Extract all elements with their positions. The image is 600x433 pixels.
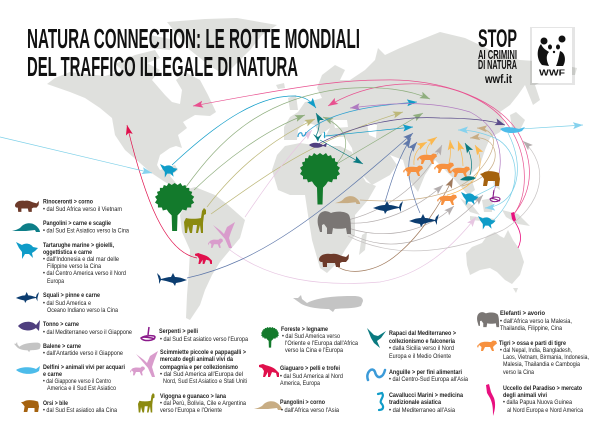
legend: snakes: • dal Sud Est asiatico verso l'Europa (160, 336, 248, 343)
world map (47, 18, 577, 320)
arrow: parrot to South East Asia (230, 217, 476, 283)
legend: eels (367, 369, 468, 383)
icon: turtle Caribbean (160, 164, 178, 178)
campaign slogan: wwf.it (484, 72, 512, 86)
icon: eagle (367, 328, 386, 348)
legend: forests: • dal Sud America verso (282, 333, 340, 340)
legend: monkeys and parrots (130, 349, 247, 385)
arrow: timber to Europe (194, 115, 305, 190)
icon: monkey (208, 238, 223, 248)
legend: turtles: • dall'Indonesia e dal mar delle (43, 256, 119, 263)
legend: bird of paradise: degli animali vivi (503, 392, 547, 399)
legend: forests: verso la Cina e l'Europa (285, 347, 343, 354)
legend: forests: l'Oriente e l'Europa dall'Africa (285, 340, 358, 347)
arrow: vicuna to Europe (207, 119, 315, 207)
icon: tiger 2 (403, 166, 423, 176)
icon: tree Africa (300, 153, 340, 204)
WWF logo (530, 27, 575, 85)
legend: African pangolins (254, 399, 339, 414)
arrow: seahorse to Asia (325, 127, 413, 136)
arrow: bird of paradise to Russia (328, 84, 524, 214)
legend: African pangolins: Pangolini > corno (280, 399, 325, 406)
arrow: pangolin to China (462, 138, 495, 186)
icon: snake (141, 327, 155, 341)
legend: pangolins: • dal Sud Est Asiatico verso la Cina (43, 228, 129, 234)
legend: tuna (18, 320, 132, 336)
legend: seahorses: Cavallucci Marini > medicina (389, 392, 463, 399)
icon: seahorse Mediterranean (324, 132, 325, 138)
legend: tigers (477, 340, 589, 376)
arrow: African timber to Europe (323, 117, 346, 165)
icon: shark Indian Ocean 1 (373, 201, 403, 214)
legend: jaguars: • dal Sud America al Nord (280, 373, 343, 380)
legend: raptors: Rapaci dal Mediterraneo > (389, 330, 456, 337)
arrow: jaguar to North America (127, 125, 197, 258)
icon: eagle (313, 134, 322, 142)
icon: parrot (213, 222, 235, 248)
legend: jaguars (259, 364, 343, 387)
icon: monkey (130, 366, 145, 375)
arrow: elephant to China (348, 141, 540, 251)
icon: tiger 4 (450, 166, 470, 177)
icon: vicuna (184, 208, 206, 233)
icon: turtle Asia 2 (478, 216, 496, 230)
legend: seahorses (378, 392, 463, 414)
arrow: shark from South America to China (187, 133, 413, 278)
legend: sharks: • dal Sud America e (43, 300, 91, 307)
legend: turtles: • dal Centro America verso il Nord (43, 270, 126, 277)
icon: snake (490, 190, 500, 202)
legend: dolphins: Delfini > animali vivi per acquari (43, 364, 125, 371)
legend: bears (21, 400, 117, 414)
legend: sharks: Squali > pinne e carne (43, 292, 100, 299)
legend: snakes (141, 327, 248, 343)
icon: eel Europe (298, 132, 306, 137)
icon: rhino (319, 254, 349, 267)
legend: jaguars: Giaguaro > pelli e trofei (280, 365, 340, 372)
legend: turtles: Europa (47, 278, 64, 285)
legend: monkeys and parrots: • dal Sud America all'Europa del (160, 371, 243, 378)
legend: bird of paradise: al Nord Europa e Nord America (507, 407, 583, 414)
legend: whales: • dall'Antartide verso il Giappone (43, 350, 123, 357)
legend: bears: Orsi > bile (43, 400, 68, 407)
icon: bird of paradise (511, 212, 516, 222)
campaign slogan: STOP (478, 25, 517, 53)
legend: rhinos: • dal Sud Africa verso il Vietnam (43, 206, 122, 213)
icon: tuna (18, 320, 40, 331)
arrow: dolphin to South East Asia (485, 133, 517, 208)
icon: tiger (477, 340, 497, 351)
icon: rhino (15, 201, 39, 212)
icon: bear (480, 171, 500, 186)
icon: tree South America (155, 183, 194, 231)
legend: elephants: Elefanti > avorio (500, 310, 545, 317)
legend: tuna: • dal Mediterraneo verso il Giappone (43, 329, 132, 336)
legend: vicuna: verso l'Europa e l'Oriente (160, 407, 222, 414)
arrow: tiger 5 (447, 145, 480, 195)
arrow: shark from Indian Ocean 2 (409, 142, 420, 213)
legend: jaguars: America, Europa (280, 380, 320, 387)
legend: forests (261, 326, 358, 354)
legend: pangolins (12, 220, 129, 234)
legend: monkeys and parrots: Scimmiette piccole e pappagalli > (160, 349, 246, 356)
icon: jaguar (195, 253, 212, 264)
title (27, 23, 360, 82)
arrow: elephant to Philippines (348, 195, 483, 244)
icon: pangolin (335, 196, 360, 204)
legend: tigers: Tigri > ossa e parti di tigre (499, 340, 566, 347)
arrow: dolphin to Central America (0, 137, 152, 173)
title: DEL TRAFFICO ILLEGALE DI NATURA (27, 51, 298, 82)
icon: dolphin (16, 366, 40, 374)
arrow: parrot to Europe (245, 130, 312, 217)
legend: seahorses: • dal Mediterraneo all'Asia (389, 407, 456, 414)
legend: raptors: • dalla Sicilia verso il Nord (389, 345, 454, 352)
legend: forests: Foreste > legname (281, 326, 328, 333)
icon: bird of paradise (486, 384, 495, 416)
icon: tiger 5 (437, 194, 457, 205)
legend: elephants (477, 310, 572, 332)
legend: raptors (367, 328, 456, 360)
campaign slogan (478, 25, 517, 86)
arrow: turtle short route (474, 184, 497, 197)
legend: vicuna: • dal Perù, Bolivia, Cile e Argentina (160, 400, 247, 407)
icon: whale (14, 342, 41, 352)
legend: tigers: Laos, Vietnam, Birmania, Indonesia, (503, 354, 589, 361)
legend: African pangolins: • dall'Africa verso l'Asia (281, 407, 339, 414)
legend: dolphins: e carne (43, 371, 62, 378)
legend: turtles: Tartarughe marine > gioielli, (43, 242, 114, 249)
legend: vicuna (138, 393, 247, 414)
legend: monkeys and parrots: compagnia e per collezionismo (160, 364, 238, 371)
legend: monkeys and parrots: Nord, Sud Est Asiatico e Stati Uniti (163, 378, 247, 385)
legend: rhinos: Rinoceronti > corno (43, 198, 93, 206)
icon: elephant (477, 312, 499, 327)
icon: shark Atlantic (157, 273, 187, 286)
legend: sharks: Oceano Indiano verso la Cina (47, 307, 118, 314)
arrow: rhino to Vietnam (336, 178, 453, 271)
trade route arrows (0, 80, 583, 283)
legend: bears: • dal Sud Est asiatico alla Cina (43, 407, 117, 414)
icon: elephant (318, 211, 351, 234)
arrow: elephant to Asia north (348, 145, 442, 220)
icon: jaguar (259, 364, 279, 377)
legend: eels: • dal Centro-Sud Europa all'Asia (389, 376, 468, 383)
arrow: elephant to Malaysia (348, 206, 454, 234)
arrow: shark from Indian Ocean 1 (385, 138, 411, 202)
legend: turtles: Filippine verso la Cina (47, 263, 101, 270)
legend: raptors: Europa e il Medio Oriente (389, 353, 451, 360)
arrow: dolphin across the Pacific (505, 125, 583, 130)
legend: bird of paradise (486, 384, 583, 416)
icon: whale (293, 295, 363, 312)
legend: whales: Balene > carne (43, 343, 81, 350)
arrow: tiger 2 (427, 137, 437, 155)
icon: seahorse Asia (460, 176, 476, 181)
legend: sharks (16, 292, 118, 314)
icon: tuna (309, 143, 327, 148)
campaign slogan: DI NATURA (478, 58, 517, 72)
arrow: tiger 4 (458, 141, 463, 166)
icon: tiger 3 (434, 162, 454, 173)
arrow: turtle to Europe (172, 96, 316, 165)
icon: tree (261, 327, 279, 348)
legend: bird of paradise: • dalla Papua Nuova Guinea (503, 399, 572, 406)
legend: snakes: Serpenti > pelli (159, 328, 198, 335)
icon: bear (21, 400, 39, 412)
legend: bird of paradise: Uccello del Paradiso > mercato (503, 385, 582, 392)
legend: tuna: Tonno > carne (43, 321, 79, 328)
icon: vicuna (138, 393, 154, 412)
icon: pangolin (254, 401, 282, 410)
icon: eel (367, 370, 385, 380)
legend: raptors: collezionismo e falconeria (389, 338, 455, 345)
legend: eels: Anguille > per fini alimentari (389, 369, 462, 376)
icon: parrot (136, 351, 158, 377)
icon: tiger 1 (417, 154, 437, 164)
arrow: seahorse to China (465, 143, 472, 175)
icon: turtle (16, 242, 38, 259)
arrow: bird of paradise to Europe (193, 80, 529, 215)
arrow: timber to Russia (186, 88, 430, 187)
arrow: vicuna to Orient (211, 112, 403, 214)
legend: elephants: Thailandia, Filippine, Cina (500, 325, 562, 332)
arrow: raptor to Europe (316, 113, 319, 136)
arrow: raptor to Middle East (320, 140, 363, 164)
legend: dolphins: America e il Sud Est Asiatico (47, 385, 116, 392)
legend: turtles: oggettistica e carne (43, 249, 92, 256)
legend: dolphins: • dal Giappone verso il Centro (43, 378, 111, 385)
legend: tigers: • dal Nepal, India, Bangladesh, (500, 347, 572, 354)
legend: pangolins: Pangolini > carne e scaglie (43, 220, 111, 227)
legend: tigers: verso la Cina (503, 369, 534, 376)
legend: vicuna: Vigogna e guanaco > lana (160, 393, 226, 400)
icon: bird tail (515, 222, 521, 248)
icon: seahorse (378, 393, 383, 410)
map animals (155, 127, 525, 312)
legend: whales (14, 342, 123, 357)
WWF logo: WWF (539, 68, 565, 78)
legend: monkeys and parrots: mercato degli animali vivi da (160, 356, 233, 363)
icon: dolphin Japan (500, 127, 525, 133)
arrow: tiger 3 (449, 140, 451, 163)
legend: rhinos (15, 198, 122, 213)
icon: shark Indian Ocean 2 (409, 214, 439, 227)
arrow: eel to Asia (306, 102, 417, 133)
legend: seahorses: tradizionale asiatica (389, 399, 441, 406)
arrow: turtle to China (458, 130, 515, 222)
legend: turtles (16, 242, 126, 285)
icon: shark (16, 292, 39, 303)
legend: dolphins (16, 364, 125, 392)
arrow: tuna to Japan (318, 118, 505, 144)
icon: pangolin (12, 223, 40, 232)
arrow: elephant to Thailand (348, 185, 443, 223)
arrow: snake to Europe (350, 104, 500, 193)
arrow: pangolin to Asia (360, 128, 493, 201)
campaign slogan: AI CRIMINI (478, 48, 517, 62)
arrow: tiger 1 (414, 142, 427, 165)
icon: turtle Asia 1 (461, 192, 479, 206)
legend: tigers: Malesia, Thailandia e Cambogia (503, 361, 580, 368)
legend: elephants: • dall'Africa verso la Malesia, (500, 318, 572, 325)
arrow: African timber to Asia (335, 113, 423, 165)
